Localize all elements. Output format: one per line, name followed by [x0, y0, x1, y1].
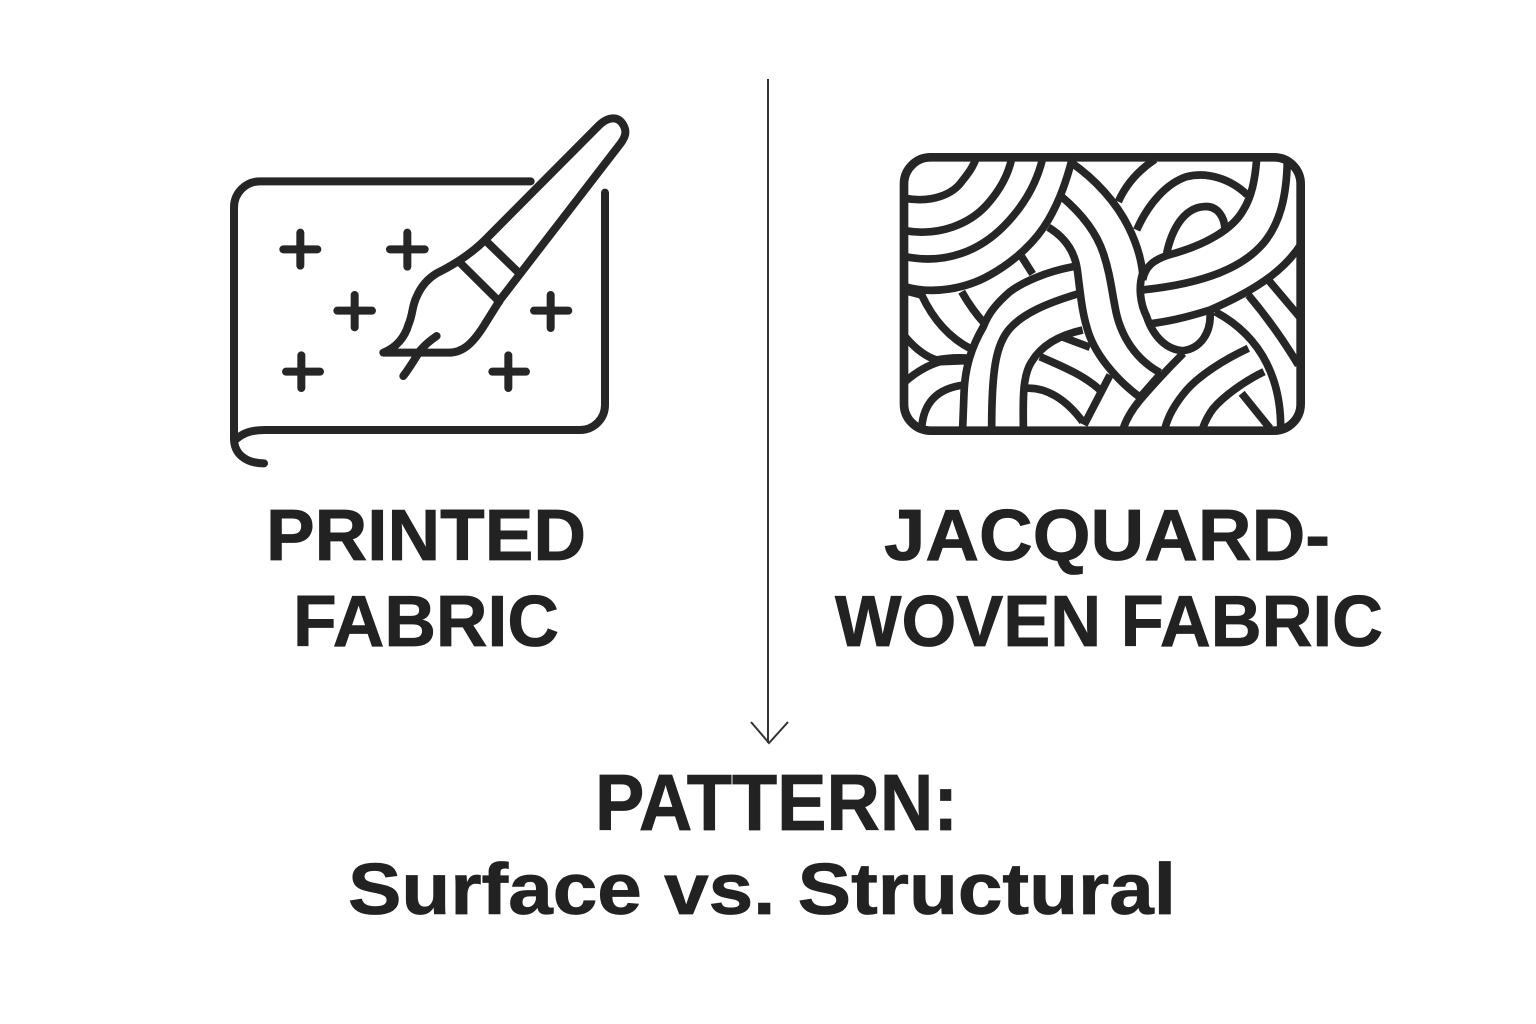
conclusion heading: Surface vs. Structural — [348, 850, 1176, 930]
icon: jacquard woven interlaced pattern — [904, 157, 1302, 431]
conclusion heading — [348, 758, 1176, 930]
heading: jacquard-woven fabric: JACQUARD- — [884, 496, 1330, 576]
icon: printed fabric with paintbrush — [234, 118, 625, 463]
arrow: vertical divider pointing down to conclusion — [751, 79, 788, 743]
heading: printed fabric — [266, 496, 586, 662]
conclusion heading: PATTERN: — [595, 758, 958, 847]
heading: printed fabric: PRINTED — [266, 496, 586, 576]
heading: jacquard-woven fabric: WOVEN FABRIC — [835, 582, 1383, 662]
heading: printed fabric: FABRIC — [293, 582, 559, 662]
heading: jacquard-woven fabric — [835, 496, 1383, 662]
